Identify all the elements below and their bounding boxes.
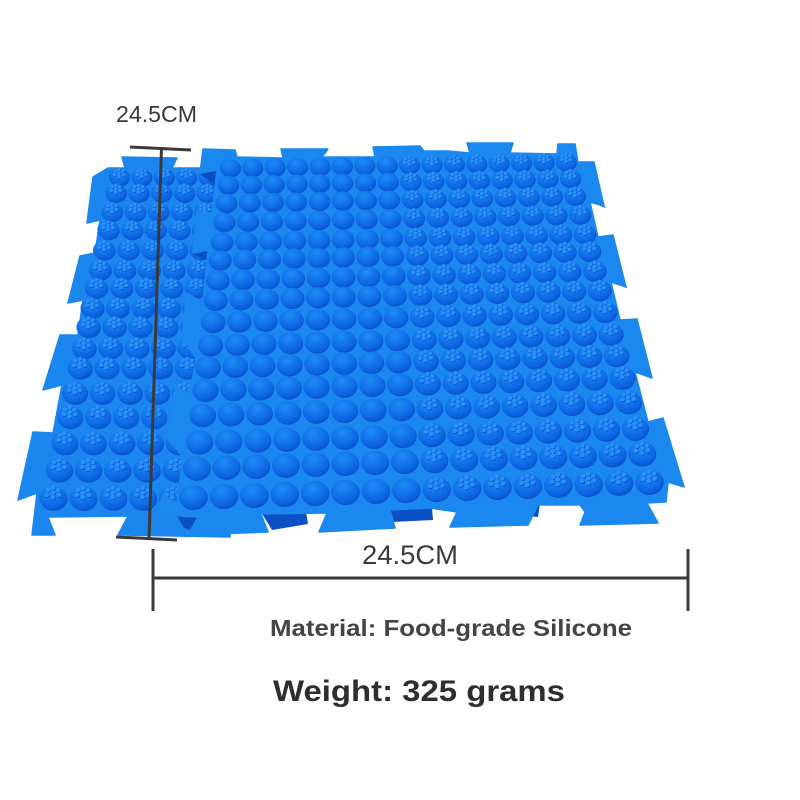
slot shadows under front mat xyxy=(167,165,627,530)
height label: 24.5CM xyxy=(116,101,197,127)
front mat outline xyxy=(155,143,684,535)
height dimension marker xyxy=(116,147,191,540)
back mat outline xyxy=(18,157,230,537)
front silicone mat xyxy=(155,143,684,535)
back mat knobbly domes xyxy=(39,168,242,511)
width label: 24.5CM xyxy=(362,540,458,570)
material text: Material: Food-grade Silicone xyxy=(270,615,632,641)
weight text: Weight: 325 grams xyxy=(273,675,565,708)
back silicone mat xyxy=(18,157,242,537)
front mat domes: smooth left half, knobbly right half xyxy=(179,152,664,511)
width dimension marker xyxy=(153,549,688,611)
